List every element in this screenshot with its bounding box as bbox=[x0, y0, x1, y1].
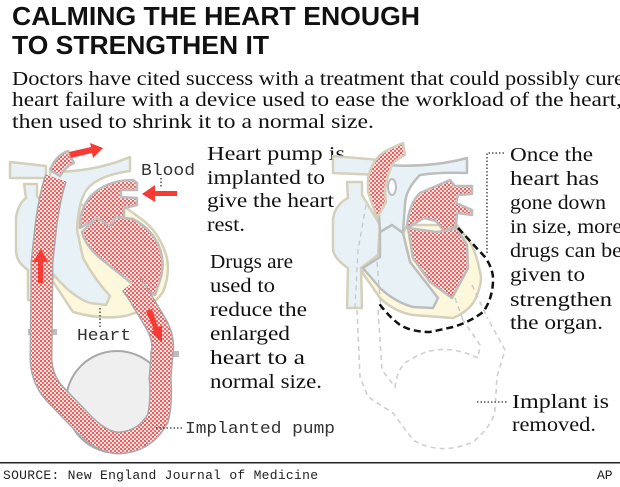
title bbox=[12, 1, 420, 60]
right atrium bbox=[333, 182, 380, 308]
right text: once the heart: the organ. bbox=[510, 312, 603, 334]
pulmonary artery band bbox=[10, 162, 46, 178]
right text: once the heart: in size, more bbox=[510, 216, 620, 238]
central vessels and right ventricle bbox=[50, 157, 130, 305]
middle text: drugs: reduce the bbox=[210, 299, 307, 321]
right diagram: recovered heart bbox=[333, 143, 507, 449]
title: TO STRENGTHEN IT bbox=[12, 30, 269, 60]
right text: once the heart: heart has bbox=[510, 168, 599, 190]
intro text: heart failure with a device used to ease the workload of the heart, bbox=[12, 89, 620, 111]
right text: implant removed bbox=[512, 391, 609, 436]
right text: once the heart: given to bbox=[510, 264, 585, 286]
arrow: into pump bbox=[146, 309, 162, 343]
leader line: implant bbox=[477, 401, 507, 403]
middle text: pump: give the heart bbox=[207, 190, 335, 212]
right ventricle bbox=[363, 225, 438, 308]
middle text: drugs: enlarged bbox=[210, 323, 290, 345]
title: CALMING THE HEART ENOUGH bbox=[12, 1, 420, 31]
pump housing bbox=[66, 351, 168, 453]
arrow: top right bbox=[69, 143, 103, 158]
middle text: pump: rest. bbox=[207, 214, 245, 236]
left ventricle bbox=[408, 228, 468, 298]
leader line: once the heart bbox=[487, 153, 506, 253]
left ventricle bbox=[82, 217, 163, 295]
aortic arch bbox=[368, 143, 405, 218]
middle text: drugs: normal size. bbox=[210, 371, 322, 393]
label: Blood bbox=[141, 162, 195, 188]
source line bbox=[0, 462, 620, 483]
heart outer wall bbox=[52, 205, 168, 317]
label: Heart bbox=[77, 308, 131, 346]
removed implant outline bbox=[357, 310, 505, 449]
arrow: up tube bbox=[33, 249, 48, 283]
intro text bbox=[12, 68, 620, 133]
intro text: then used to shrink it to a normal size. bbox=[12, 111, 374, 133]
heart outer wall bbox=[362, 225, 481, 318]
right text: once the heart: strengthen bbox=[510, 289, 612, 311]
arrow: blood into heart bbox=[142, 185, 177, 202]
source line: AP bbox=[597, 468, 613, 483]
aortic outflow bbox=[50, 151, 74, 176]
central vessel bbox=[378, 158, 467, 232]
middle text: drugs: heart to a bbox=[210, 347, 305, 369]
label: Heart: Heart bbox=[77, 327, 131, 346]
middle text: drugs: Drugs are bbox=[210, 251, 293, 273]
middle text: pump: implanted to bbox=[207, 167, 325, 189]
middle text: drugs: used to bbox=[210, 275, 275, 297]
implant tracks through heart bbox=[355, 205, 487, 320]
label: Blood: Blood bbox=[141, 162, 195, 181]
tube body bbox=[41, 178, 163, 443]
tube flanges bbox=[28, 332, 179, 354]
middle text: drugs bbox=[210, 251, 322, 393]
right text: once the heart: gone down bbox=[510, 192, 606, 214]
valve opening bbox=[388, 179, 396, 195]
label: Implanted pump: Implanted pump bbox=[185, 420, 335, 439]
pulmonary artery band bbox=[333, 156, 380, 175]
left atrium bbox=[80, 180, 137, 228]
right atrium bbox=[16, 184, 60, 300]
right text: implant removed: removed. bbox=[512, 414, 596, 436]
right text: once the heart: Once the bbox=[510, 144, 593, 166]
middle text: pump: Heart pump is bbox=[207, 143, 345, 165]
middle text: pump bbox=[207, 143, 345, 236]
intro text: Doctors have cited success with a treatment that could possibly cure bbox=[12, 68, 620, 90]
left diagram: heart with implanted pump bbox=[10, 143, 335, 453]
former heart size: dashed outline bbox=[378, 228, 493, 332]
right text: implant removed: Implant is bbox=[512, 391, 609, 413]
right text: once the heart bbox=[510, 144, 620, 334]
right text: once the heart: drugs can be bbox=[510, 240, 620, 262]
pump tube bbox=[28, 178, 179, 443]
left atrium bbox=[407, 180, 472, 231]
source line: SOURCE: New England Journal of Medicine bbox=[3, 468, 318, 483]
